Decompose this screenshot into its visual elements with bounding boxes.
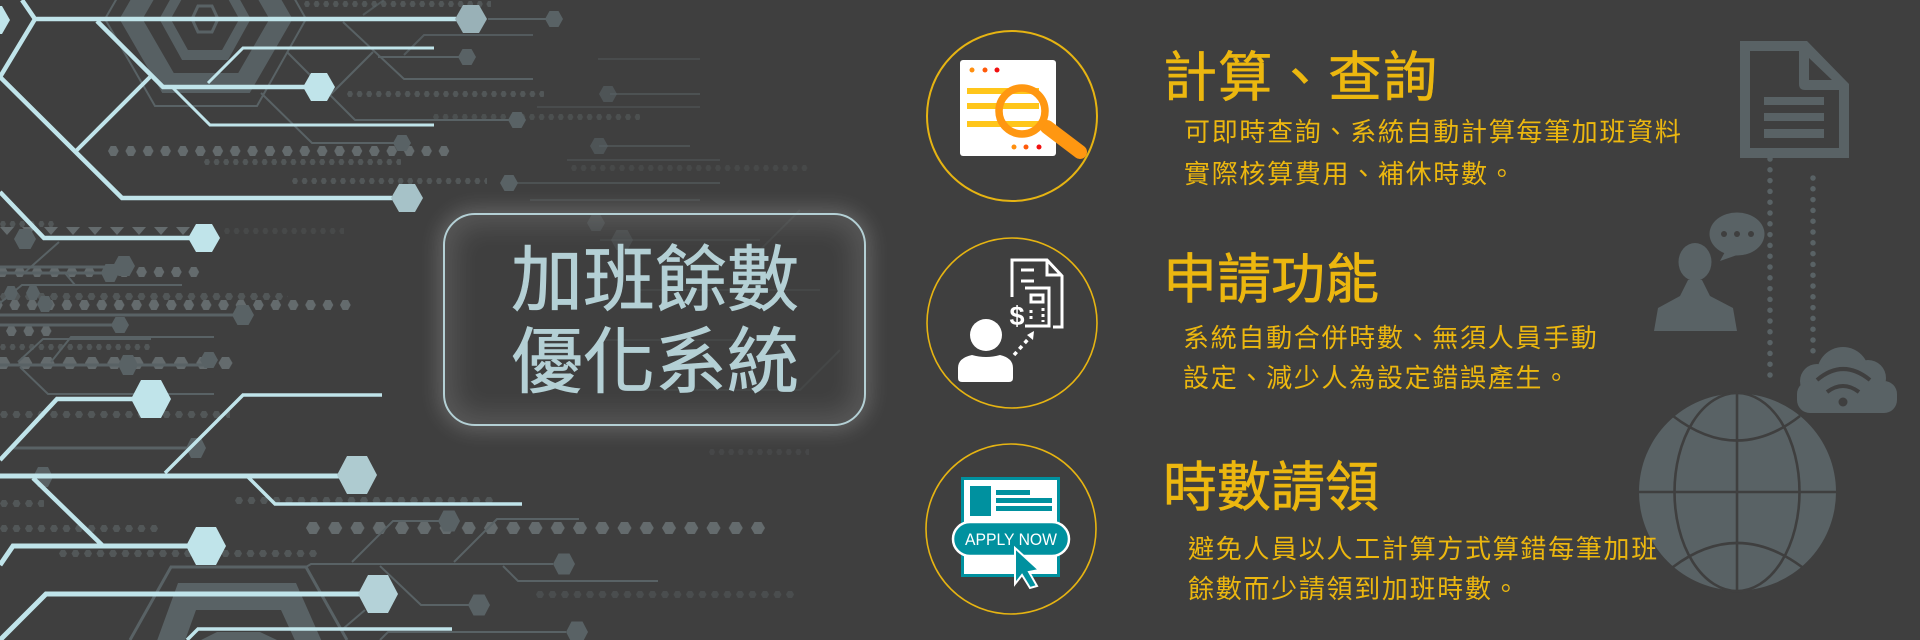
background hexagon frame: bottom [130,567,347,640]
body text 3: 避免人員以人工計算方式算錯每筆加班 [1188,534,1659,564]
button label: APPLY NOW [965,531,1057,549]
center title text [511,241,799,403]
dollar sign: $ [1009,301,1025,331]
heading 1: 計算、查詢 [1163,48,1438,108]
body text 2: 系統自動合併時數、無須人員手動 [1183,323,1599,353]
background hexagon frame: top [105,0,306,106]
body text 1 [1184,117,1683,189]
center title text: 加班餘數 [511,241,799,321]
center title box [443,213,866,426]
feature icon 1: search document [927,31,1097,201]
feature icon 2: person and bill [927,238,1097,408]
body text 2 [1183,323,1599,393]
icon: wifi cloud [1797,347,1897,413]
center title text: 優化系統 [511,323,799,403]
heading 3: 時數請領 [1163,458,1379,518]
icon: person with speech bubble [1654,212,1764,331]
body text 3 [1188,534,1659,604]
bright circuit nodes [0,5,487,613]
feature icon 3: apply now [926,444,1096,614]
gray circuit lines and nodes [0,0,840,640]
body text 1: 可即時查詢、系統自動計算每筆加班資料 [1184,117,1683,147]
dotted hexagon rows [0,0,811,599]
icon: document [1740,41,1849,158]
body text 2: 設定、減少人為設定錯誤產生。 [1183,363,1571,393]
heading 2: 申請功能 [1163,250,1379,310]
bright circuit lines [0,0,522,640]
dotted connector lines [1770,159,1813,376]
right decorative icons [1639,41,1897,591]
body text 3: 餘數而少請領到加班時數。 [1188,574,1520,604]
body text 1: 實際核算費用、補休時數。 [1184,159,1516,189]
icon: globe [1639,393,1836,591]
